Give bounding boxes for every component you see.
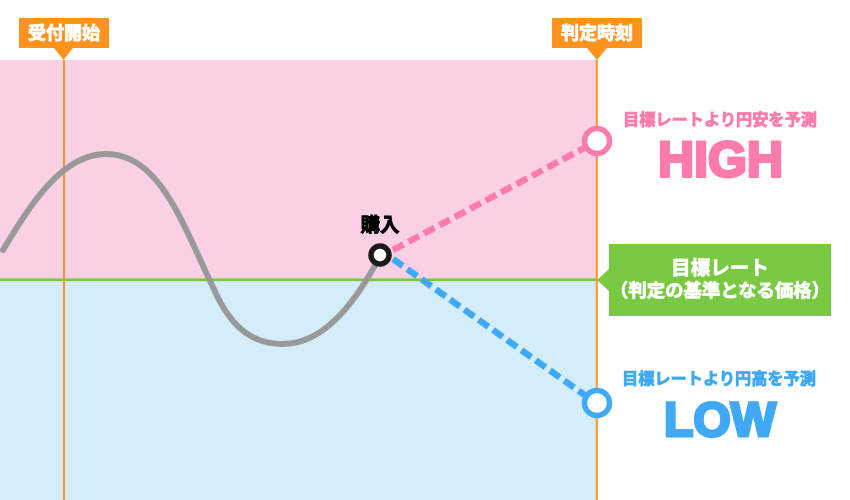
low endpoint marker	[584, 390, 610, 416]
purchase label: 購入	[360, 214, 400, 236]
label: judgement time: 判定時刻	[561, 24, 633, 44]
target rate callout: 目標レート	[671, 258, 769, 280]
panel: blue lower zone	[0, 280, 596, 500]
high caption: 目標レートより円安を予測	[623, 110, 817, 130]
price curve	[3, 154, 380, 344]
low caption: 目標レートより円高を予測	[622, 370, 816, 388]
target rate callout	[597, 244, 831, 316]
label: start of acceptance: 受付開始	[28, 22, 100, 44]
panel: pink upper zone	[0, 60, 596, 280]
start time vertical line	[63, 60, 65, 500]
low dashed arrow	[393, 259, 586, 396]
purchase point marker	[371, 246, 389, 264]
judgement time vertical line	[596, 60, 598, 500]
high endpoint marker	[584, 128, 610, 154]
target rate line	[0, 278, 597, 281]
high dashed arrow	[393, 147, 586, 250]
high label: HIGH	[658, 132, 783, 188]
label: judgement time	[552, 18, 642, 60]
target rate callout: （判定の基準となる価格）	[610, 280, 830, 301]
low label: LOW	[664, 394, 777, 447]
label: start of acceptance	[19, 18, 109, 60]
